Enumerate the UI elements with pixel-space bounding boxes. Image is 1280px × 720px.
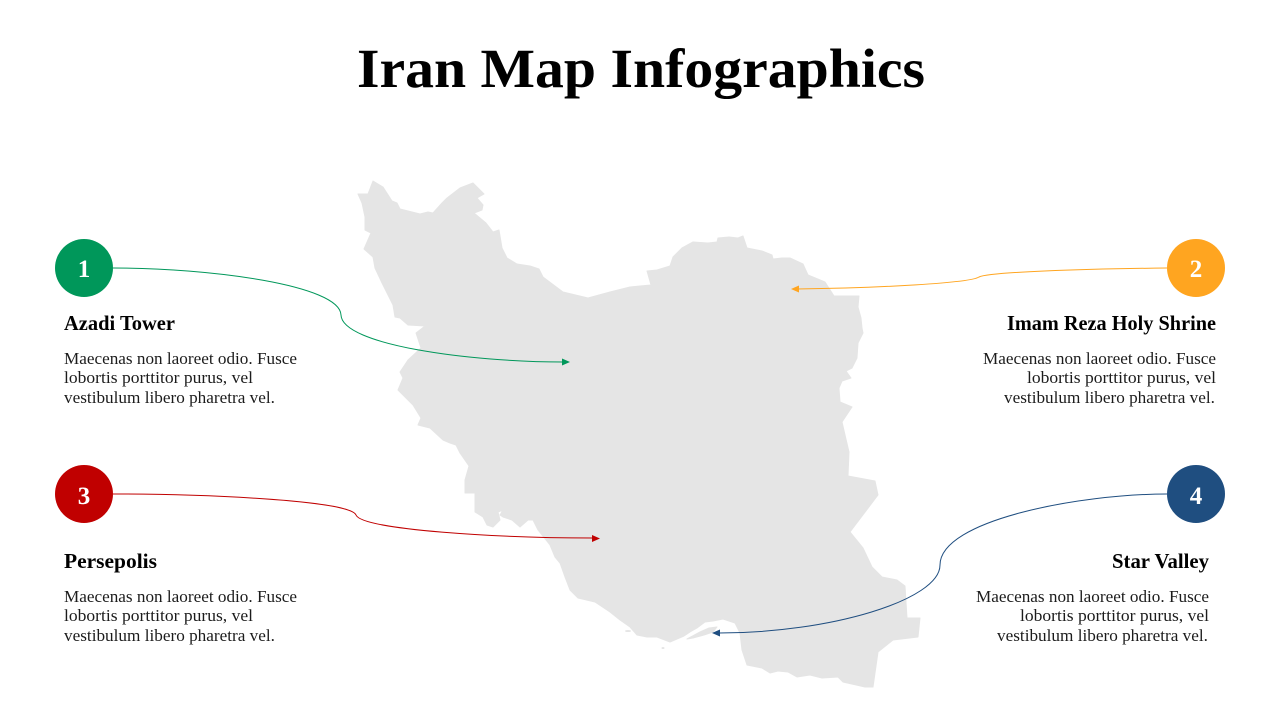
heading: Imam Reza Holy Shrine: Imam Reza Holy Shrine bbox=[1007, 311, 1216, 335]
text block: Star Valley bbox=[976, 587, 1209, 645]
text block: Imam Reza Holy Shrine: vestibulum libero pharetra vel. bbox=[1004, 388, 1215, 407]
text block: Star Valley: Maecenas non laoreet odio. Fusce bbox=[976, 587, 1209, 606]
icon: number 4: 4 bbox=[1190, 483, 1203, 510]
text block: Azadi Tower: Maecenas non laoreet odio. Fusce bbox=[64, 349, 297, 368]
arrow: blue connector bbox=[712, 494, 1167, 636]
arrow: green connector bbox=[113, 268, 570, 366]
text block: Imam Reza Holy Shrine: lobortis porttitor purus, vel bbox=[1027, 368, 1216, 387]
text block: Star Valley: lobortis porttitor purus, vel bbox=[1020, 606, 1209, 625]
icon: number 1: 1 bbox=[78, 256, 90, 283]
panel: Imam Reza Holy Shrine bbox=[983, 239, 1225, 407]
icon: number 3 bbox=[55, 465, 113, 523]
text block: Azadi Tower: vestibulum libero pharetra vel. bbox=[64, 388, 275, 407]
heading: Persepolis: Persepolis bbox=[64, 549, 157, 573]
icon: number 2: 2 bbox=[1190, 256, 1202, 283]
text block: Azadi Tower bbox=[64, 349, 297, 407]
panel: Azadi Tower bbox=[55, 239, 297, 407]
icon: number 1 bbox=[55, 239, 113, 297]
heading: Star Valley: Star Valley bbox=[1112, 549, 1209, 573]
text block: Imam Reza Holy Shrine: Maecenas non laoreet odio. Fusce bbox=[983, 349, 1216, 368]
title: Iran Map Infographics bbox=[357, 38, 925, 99]
text block: Azadi Tower: lobortis porttitor purus, vel bbox=[64, 368, 253, 387]
text block: Persepolis: Maecenas non laoreet odio. Fusce bbox=[64, 587, 297, 606]
heading: Azadi Tower: Azadi Tower bbox=[64, 311, 175, 335]
text block: Persepolis: vestibulum libero pharetra vel. bbox=[64, 626, 275, 645]
arrow: orange connector bbox=[791, 268, 1167, 292]
icon: number 2 bbox=[1167, 239, 1225, 297]
text block: Persepolis bbox=[64, 587, 297, 645]
text block: Imam Reza Holy Shrine bbox=[983, 349, 1216, 407]
icon: number 4 bbox=[1167, 465, 1225, 523]
map: Iran bbox=[358, 181, 920, 687]
panel: Star Valley bbox=[976, 465, 1225, 645]
icon: number 3: 3 bbox=[78, 483, 90, 510]
text block: Persepolis: lobortis porttitor purus, vel bbox=[64, 606, 253, 625]
text block: Star Valley: vestibulum libero pharetra vel. bbox=[997, 626, 1208, 645]
panel: Persepolis bbox=[55, 465, 297, 645]
arrow: red connector bbox=[113, 494, 600, 542]
